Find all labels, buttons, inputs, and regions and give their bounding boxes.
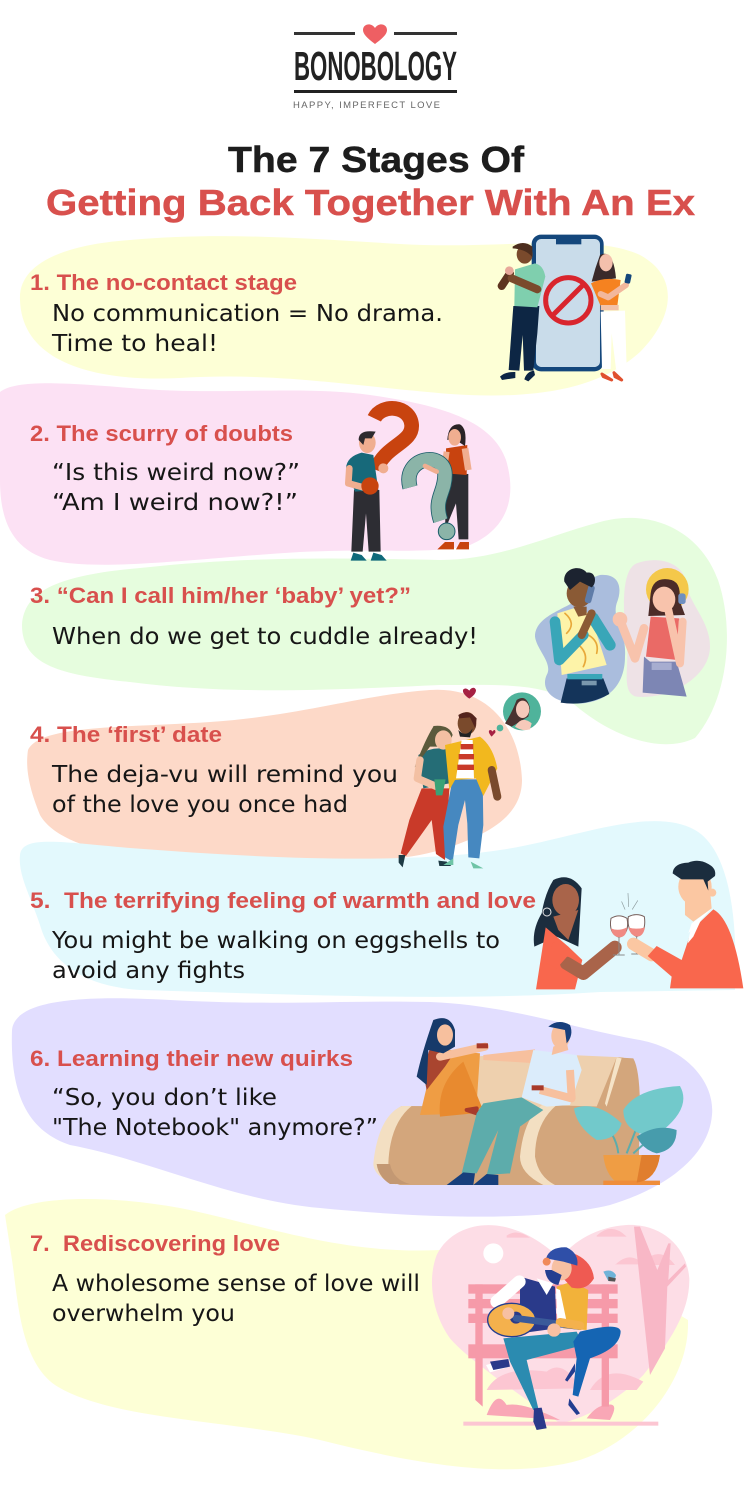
title (46, 139, 695, 223)
panel: stage 4 background (27, 690, 522, 862)
stage 2 text (52, 460, 300, 516)
illustration: couple on sofa with plant (373, 1018, 683, 1185)
title: The 7 Stages Of (228, 139, 525, 180)
title: Getting Back Together With An Ex (46, 182, 695, 223)
panel: stage 3 background (22, 518, 727, 744)
stage 7 text: overwhelm you (52, 1301, 235, 1327)
logo (293, 24, 457, 111)
illustration: couple toasting with wine (534, 861, 743, 989)
illustration: man and woman on a phone call (535, 560, 710, 704)
illustration: dating couple with thought bubble (399, 688, 541, 868)
panel: stage 6 background (12, 998, 712, 1217)
stage 1 text: No communication = No drama. (52, 301, 443, 327)
stage 3 heading: 3. “Can I call him/her ‘baby’ yet?” (30, 583, 411, 608)
panel: stage 7 background (5, 1199, 688, 1469)
stage 7 heading: 7. Rediscovering love (30, 1231, 280, 1256)
stage 4 text: of the love you once had (52, 792, 348, 818)
stage 4 heading: 4. The ‘first’ date (30, 722, 222, 747)
stage 2 text: “Am I weird now?!” (52, 490, 298, 516)
illustration: couple with question marks (346, 408, 469, 561)
stage 1 heading: 1. The no-contact stage (30, 270, 297, 295)
stage 5 text: You might be walking on eggshells to (51, 928, 500, 954)
logo: BONOBOLOGY (294, 43, 457, 89)
stage 2 text: “Is this weird now?” (52, 460, 300, 486)
stage 1 text: Time to heal! (51, 331, 218, 357)
panel: stage 5 background (20, 821, 736, 997)
stage 1 text (51, 301, 443, 357)
logo: HAPPY, IMPERFECT LOVE (293, 100, 440, 111)
stage 5 heading: 5. The terrifying feeling of warmth and love (30, 888, 536, 913)
stage 2 heading: 2. The scurry of doubts (30, 421, 293, 446)
stage 6 text (52, 1085, 378, 1141)
stage 7 text (52, 1271, 420, 1327)
illustration: couple beside phone with prohibition sign (500, 235, 632, 381)
illustration: couple on bench inside heart (432, 1225, 689, 1430)
stage 3 text: When do we get to cuddle already! (52, 624, 478, 650)
stage 6 heading: 6. Learning their new quirks (30, 1046, 353, 1071)
stage 5 text: avoid any fights (52, 958, 245, 984)
panel: stage 1 background (20, 236, 668, 395)
stage 4 text: The deja-vu will remind you (51, 762, 398, 788)
stage 4 text (51, 762, 398, 818)
stage 7 text: A wholesome sense of love will (52, 1271, 420, 1297)
stage 5 text (51, 928, 500, 984)
panel: stage 2 background (0, 383, 510, 565)
stage 6 text: “So, you don’t like (52, 1085, 277, 1111)
stage 6 text: "The Notebook" anymore?” (52, 1115, 378, 1141)
